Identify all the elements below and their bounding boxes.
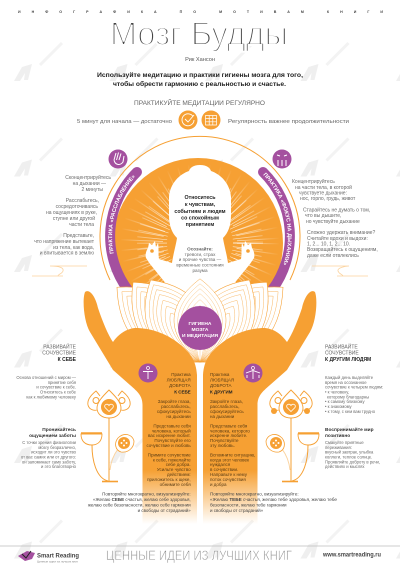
heading and text: feeling of care: Проникайтесь [42, 426, 76, 433]
scroll ornament right [312, 266, 368, 276]
heading: compassion to self: СОЧУВСТВИЕ [42, 351, 77, 357]
heading and text: positive world: Смакуйте приятные [325, 440, 364, 445]
thin outer arc [100, 136, 300, 280]
text: repeat for others: Повторяйте многократно, визуализируйте: [210, 490, 299, 496]
text: loving kindness to others: когда этот человек [210, 458, 249, 462]
text: notice feelings: разума [192, 268, 208, 273]
text: self acceptance: принятие себя [48, 380, 76, 385]
text: breath focus steps: но чувствуйте дыхание [306, 218, 360, 225]
heading and text: feeling of care: от вас самих или от другого: [21, 454, 76, 460]
text: relaxation steps: и впитывается в землю [40, 250, 94, 256]
footer slogan: ЦЕННЫЕ ИДЕИ ИЗ ЛУЧШИХ КНИГ [106, 548, 293, 563]
text: loving kindness to self: на дыхании [166, 414, 191, 419]
text: four people: • к человеку, [325, 390, 349, 394]
text: relaxation steps: на дыхании — [73, 181, 106, 187]
heading: compassion to others: РАЗВИВАЙТЕ [325, 342, 358, 350]
text: loving kindness to self: к себе, пожелайте [153, 456, 191, 462]
footer rule [0, 545, 400, 547]
text: relaxation steps: из тела, как вода, [53, 245, 94, 251]
text: loving kindness to others: нуждался [210, 462, 231, 467]
text: breath focus steps: нос, горло, грудь, живот [300, 196, 356, 202]
lead text [97, 71, 303, 88]
text: repeat for self: «Желаю СЕБЕ счастья, желаю себе здоровья, [93, 497, 191, 502]
central circle: brain hygiene: И МЕДИТАЦИЯ [182, 333, 218, 339]
text: four people: которому благодарны [327, 394, 369, 400]
text: relaxation steps: Расслабьтесь, [66, 198, 99, 204]
text: loving kindness to others: искренне любите. [210, 433, 247, 438]
text: self acceptance: Относитесь к себе [40, 390, 77, 394]
heading and text: feeling of care: мозгу безразлично, [38, 445, 76, 450]
text: breath focus steps: на части тела, в которой [295, 184, 352, 191]
text: loving kindness to others: сфокусируйтесь [210, 408, 244, 414]
text: loving kindness to others: эту любовь. [210, 443, 235, 448]
text: loving kindness to others: на дыхании [210, 414, 235, 419]
text: loving kindness to others: Направьте к нему [210, 472, 248, 477]
text: repeat for others [210, 490, 338, 513]
text: loving kindness to self: ДОБРОТА [169, 383, 191, 388]
heading and text: feeling of care: и это благотворно [41, 464, 77, 469]
text: four people: • к самому близкому [325, 399, 365, 404]
text: breath focus steps: даже если отвлеклись [307, 253, 359, 259]
text: loving kindness to others: К ДРУГИМ [210, 390, 233, 394]
text: loving kindness to others: расслабьтесь, [210, 404, 240, 409]
note: five minutes: 5 минут для начала — достаточно [77, 119, 172, 125]
text: loving kindness to self: обнимите себя [160, 482, 191, 487]
heading and text: positive world [325, 426, 380, 469]
text: notice feelings: тревоги, страх [185, 252, 216, 257]
left hand [84, 291, 197, 525]
text: self acceptance: Основа отношений с миром — [16, 375, 77, 380]
text: calm acceptance: со спокойным [181, 214, 219, 222]
text: repeat for others: и свободы от страданий» [210, 507, 264, 513]
heading and text: positive world: вкусный завтрак, улыбка [325, 450, 374, 455]
purple band: breath focus: ПРАКТИКА «ФОКУС НА ДЫХАНИИ» [263, 172, 292, 265]
heading and text: feeling of care: ощущением заботы [29, 432, 76, 439]
text: relaxation steps: Сконцентрируйтесь [65, 174, 111, 181]
lotus flowers left [81, 390, 134, 482]
text: loving kindness to others: Представьте себя [210, 424, 248, 428]
footer logo: Smart Reading [37, 552, 79, 560]
text: breath focus steps: чувствуете дыхание: [299, 190, 347, 196]
heading and text: positive world: коллеги, теплое солнце. [325, 454, 372, 460]
orange meditation disc [113, 158, 283, 328]
text: notice feelings: и прочие чувства — [179, 257, 222, 262]
text: loving kindness to self: действием: [167, 471, 191, 477]
footer logo [18, 551, 79, 564]
text: breath focus steps: Сложно удержать внимание? [307, 230, 375, 236]
icon: calendar [202, 110, 220, 130]
text: breath focus steps: Считайте вдохи и выдохи: [307, 235, 368, 242]
footer logo: Ценные идеи из лучших книг [37, 560, 78, 564]
text: relaxation steps: части тела [69, 222, 94, 228]
text: loving kindness to self: приложитесь к щеке, [147, 477, 191, 482]
heading and text: positive world: Воспринимайте мир [325, 426, 374, 433]
text: loving kindness to others [210, 372, 255, 487]
icon: self figure [138, 364, 158, 382]
lead text: Используйте медитацию и практики гигиены мозга для того, [97, 71, 303, 79]
text: relaxation steps: 2 минуты [81, 187, 103, 193]
buddha silhouette [146, 165, 254, 295]
text: breath focus steps: Старайтесь не думать о том, [303, 206, 370, 214]
text: loving kindness to others: ЛЮБЯЩАЯ [210, 378, 234, 382]
text: four people: время на осознанное [325, 380, 367, 385]
text: self acceptance: и сочувствие к себе. [36, 384, 76, 390]
text: loving kindness to self: человека, который [152, 428, 191, 434]
text: repeat for others: «Желаю ТЕБЕ счастья, желаю тебе здоровья, желаю тебе [210, 497, 338, 502]
central circle: brain hygiene: МОЗГА [192, 327, 209, 333]
text: repeat for others: безопасности, желаю тебе гармонии [210, 502, 287, 508]
header tagline: И Н Ф О Г Р А Ф И К А П О М О Т И В А М К Н И Г И [18, 10, 383, 14]
heading: compassion to self: РАЗВИВАЙТЕ [43, 342, 77, 350]
text: repeat for self: и свободы от страданий» [138, 507, 191, 513]
text: loving kindness to self: ЛЮБЯЩАЯ [167, 378, 191, 382]
text: loving kindness to self [147, 372, 191, 487]
text: relaxation steps [34, 174, 111, 256]
text: calm acceptance: к чувствам, [185, 202, 216, 208]
text: notice feelings: Осознайте: [187, 246, 213, 252]
text: loving kindness to others: в сочувствии. [210, 467, 238, 472]
text: relaxation steps: сосредоточиваясь [56, 204, 98, 210]
heading and text: feeling of care: он запоминает саму заботу, [22, 459, 76, 464]
lotus flowers right [266, 390, 319, 482]
right hand [203, 291, 316, 525]
icon: clock check [178, 110, 198, 130]
central circle: brain hygiene [178, 306, 222, 350]
text: four people: сочувствие к четырем людям: [325, 384, 383, 390]
scroll ornament left [32, 266, 87, 276]
icon: others figure [244, 364, 262, 382]
central circle: brain hygiene: ГИГИЕНА [189, 321, 212, 327]
purple band: breath focus [258, 167, 295, 288]
text: repeat for self [88, 490, 191, 513]
text: four people: • к знакомому [325, 404, 353, 409]
text: calm acceptance: принятием [186, 222, 214, 228]
text: loving kindness to self: вас искренне любит. [148, 433, 191, 438]
text: loving kindness to self: себе добра. [166, 462, 191, 467]
purple band: relaxation: ПРАКТИКА «РАССЛАБЛЕНИЕ» [108, 176, 134, 254]
text: four people: Каждый день выделяйте [325, 375, 374, 380]
heading and text: feeling of care [21, 426, 77, 469]
note: regularity: Регулярность важнее продолжительности [228, 119, 349, 125]
text: calm acceptance [174, 195, 226, 228]
text: breath focus steps: 1, 2... 10, 1, 2... 10. [307, 242, 350, 248]
heading: compassion to others: К ДРУГИМ ЛЮДЯМ [325, 357, 371, 363]
text: loving kindness to others: и добра [210, 482, 227, 487]
text: repeat for self: желаю себе безопасности, желаю себе гармонии [88, 502, 191, 508]
lead text: чтобы обрести гармонию с реальностью и счастье. [113, 80, 286, 88]
text: self acceptance: как к любимому человеку [26, 394, 77, 400]
text: loving kindness to self: сфокусируйтесь [157, 408, 191, 414]
text: relaxation steps: Представьте, [63, 233, 94, 239]
heading and text: positive world: переживания: [325, 445, 352, 450]
text: self acceptance [16, 375, 77, 400]
heading and text: feeling of care: С точки зрения физиологии [22, 440, 77, 445]
text: loving kindness to self: Примите сочувствие [148, 452, 191, 458]
text: loving kindness to self: сочувствие и любовь [147, 443, 191, 448]
heading and text: positive world: позитивно [325, 434, 350, 439]
text: loving kindness to others: человека, которого [210, 428, 250, 434]
text: loving kindness to self: Усильте чувство [157, 467, 191, 472]
heading and text: positive world: действиях и мыслях [325, 464, 365, 469]
text: loving kindness to others: поток сочувствия [210, 477, 246, 482]
lotus [99, 264, 301, 382]
text: relaxation steps: ступне или другой [53, 215, 95, 222]
text: loving kindness to others: Закройте глаза, [210, 398, 243, 404]
icon: relaxation hand [108, 150, 128, 168]
heading: compassion to others: СОЧУВСТВИЕ [325, 351, 359, 357]
text: breath focus steps: Концентрируйтесь [292, 178, 335, 185]
text: loving kindness to self: Представьте себя [153, 424, 191, 428]
text: notice feelings: временные состояния [176, 262, 224, 268]
text: notice feelings [176, 246, 224, 273]
heading and text: positive world: Проявляйте доброту в речи, [325, 459, 380, 464]
heading: compassion to self: К СЕБЕ [58, 357, 77, 363]
text: breath focus steps: Возвращайтесь к ощущениям, [307, 246, 378, 253]
text: four people: • к тому, с кем вам трудно [325, 409, 376, 414]
purple band: relaxation [105, 167, 142, 288]
text: loving kindness to self: Закройте глаза, [158, 398, 191, 404]
heading and text: feeling of care: исходит ли это чувство [31, 450, 77, 455]
text: breath focus steps: что вы дышите, [305, 213, 341, 219]
icon: breathing figure [272, 150, 292, 168]
section heading: ПРАКТИКУЙТЕ МЕДИТАЦИИ РЕГУЛЯРНО [134, 99, 265, 107]
author: Рик Хансон [185, 57, 215, 63]
text: loving kindness to others: Практика [210, 372, 230, 377]
text: loving kindness to self: Практика [171, 372, 191, 377]
text: loving kindness to others: ДОБРОТА [210, 383, 232, 388]
text: loving kindness to others: Вспомните ситуацию, [210, 452, 255, 458]
text: loving kindness to self: К СЕБЕ [174, 390, 191, 394]
text: calm acceptance: событиям и людям [174, 208, 226, 215]
text: four people [325, 375, 383, 414]
text: relaxation steps: на ощущениях в руке, [46, 210, 97, 216]
footer url: www.smartreading.ru [322, 552, 381, 558]
text: repeat for self: Повторяйте многократно, визуализируйте: [102, 490, 191, 496]
title: Мозг Будды [110, 15, 288, 52]
text: breath focus steps [292, 178, 378, 259]
text: loving kindness to self: Почувствуйте его [154, 437, 191, 443]
text: calm acceptance: Относитесь [185, 195, 216, 201]
text: relaxation steps: что напряжение вытекает [34, 239, 95, 245]
heading: compassion to others [325, 342, 371, 363]
heading: compassion to self [42, 342, 77, 363]
text: loving kindness to others: Почувствуйте [210, 437, 239, 443]
text: loving kindness to self: расслабьтесь, [161, 404, 191, 409]
